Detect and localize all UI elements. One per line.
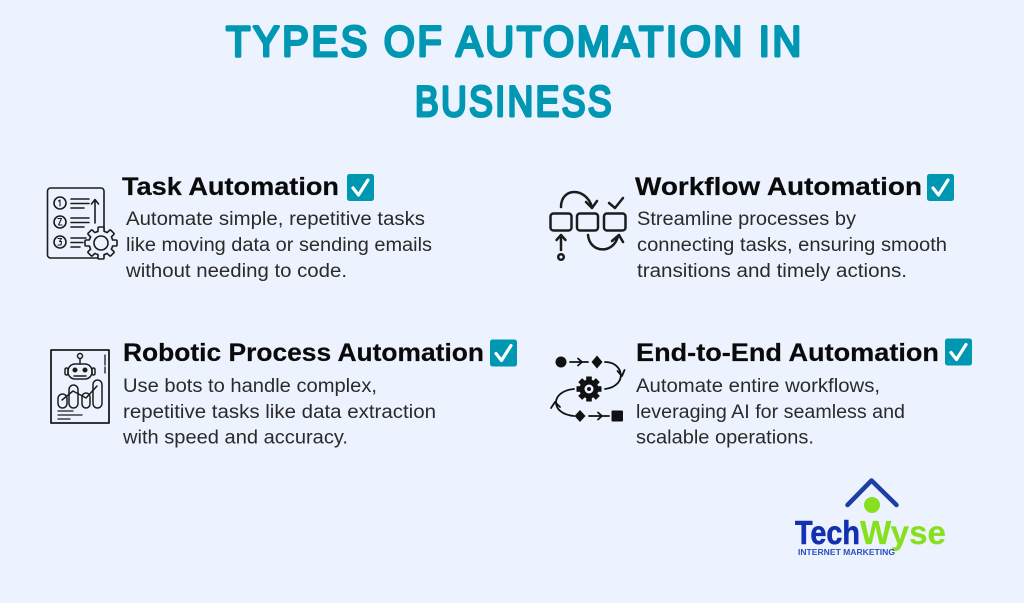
panel: workflow automation (550, 173, 954, 282)
description: transitions and timely actions. (637, 261, 907, 282)
panel: robotic process automation (51, 339, 517, 448)
description: Streamline processes by (637, 209, 857, 230)
heading: End-to-End Automation (636, 339, 939, 367)
icon: check box (927, 174, 954, 201)
description: repetitive tasks like data extraction (123, 402, 436, 423)
title: TYPES OF AUTOMATION IN (226, 18, 804, 66)
panel: end-to-end automation (551, 338, 972, 448)
description (125, 209, 432, 282)
icon: workflow boxes and arrows (550, 192, 626, 260)
icon: robot report (51, 350, 109, 423)
logo wordmark: Tech (795, 514, 860, 551)
description: Automate simple, repetitive tasks (126, 209, 425, 230)
description (637, 209, 947, 282)
description (636, 376, 905, 448)
logo: TechWyse (795, 480, 946, 557)
title: BUSINESS (415, 78, 614, 126)
title (226, 18, 804, 126)
description: like moving data or sending emails (126, 235, 432, 256)
heading: Robotic Process Automation (123, 339, 484, 367)
description: Use bots to handle complex, (123, 376, 377, 397)
description: connecting tasks, ensuring smooth (637, 235, 947, 256)
heading: Workflow Automation (635, 173, 922, 201)
description: leveraging AI for seamless and (636, 402, 905, 423)
description: with speed and accuracy. (122, 428, 348, 448)
description: without needing to code. (125, 261, 347, 282)
icon: house roof and dot (848, 480, 896, 513)
icon: end-to-end process flow (551, 356, 624, 422)
description: scalable operations. (636, 428, 814, 448)
icon: check box (347, 174, 374, 201)
description: Automate entire workflows, (636, 376, 880, 397)
logo wordmark (795, 514, 946, 557)
icon: numbered checklist with gear (48, 188, 117, 259)
panel: task automation (48, 173, 432, 282)
icon: check box (945, 338, 972, 366)
description (122, 376, 436, 448)
logo wordmark: INTERNET MARKETING (798, 548, 895, 557)
heading: Task Automation (122, 173, 339, 201)
icon: check box (490, 340, 517, 366)
logo wordmark: Wyse (860, 514, 946, 551)
